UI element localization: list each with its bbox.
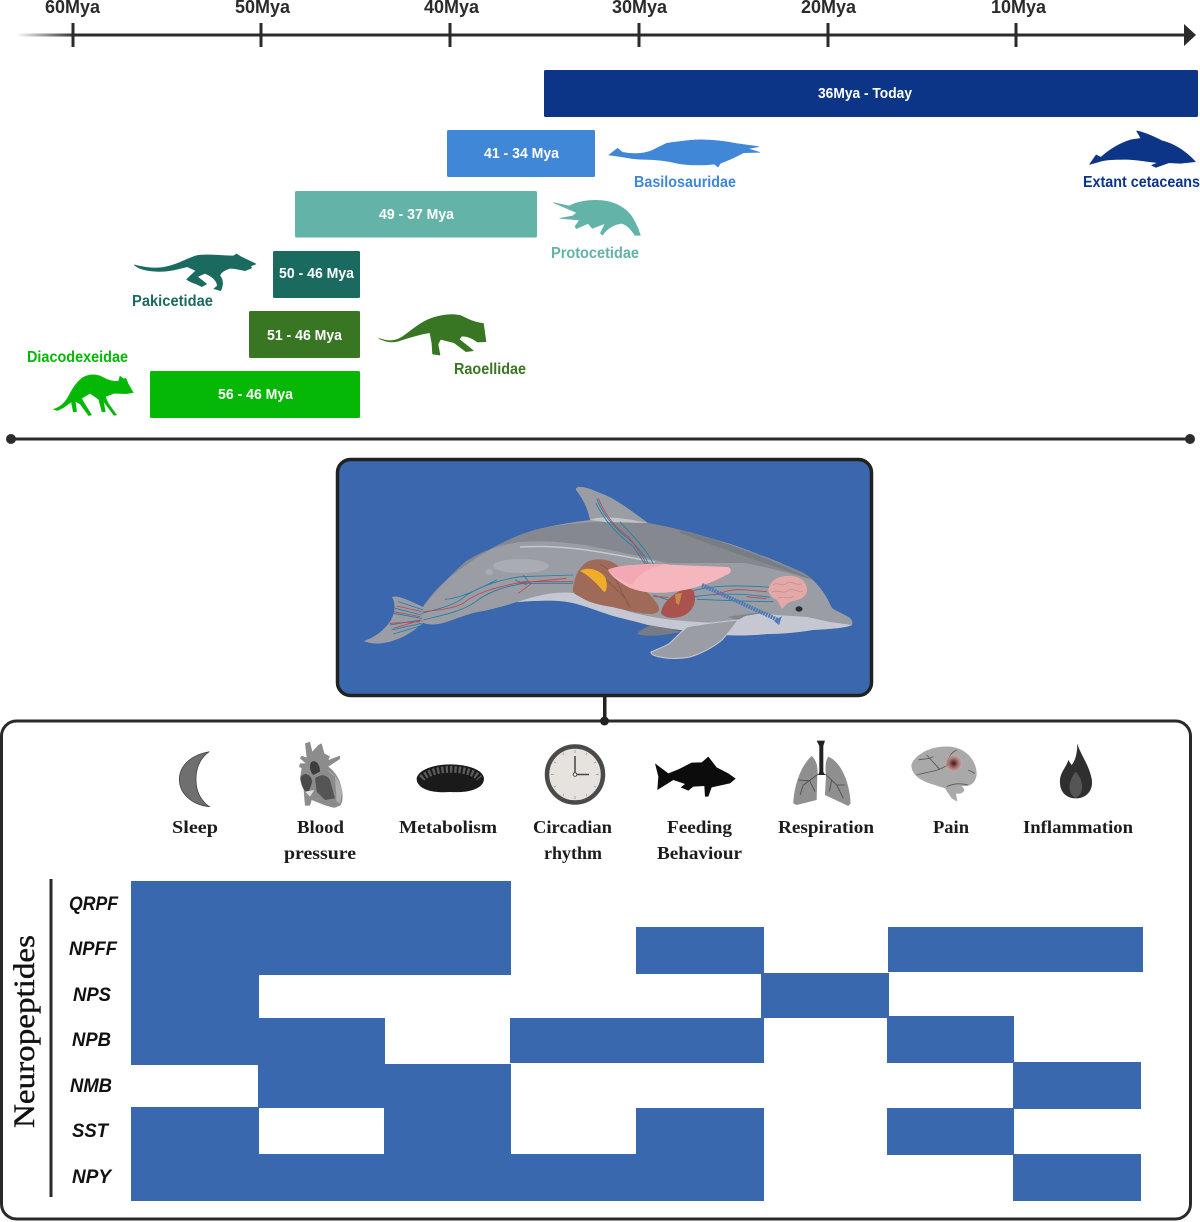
illustration: dolphin anatomy (364, 487, 852, 658)
icon: heart (299, 742, 343, 808)
icon: flame (1060, 743, 1092, 798)
label: inflammation: Inflammation (1023, 817, 1133, 837)
row labels: QRPF (69, 894, 119, 915)
row labels (69, 894, 119, 1188)
row labels: NPB (72, 1030, 111, 1051)
label: pain: Pain (933, 817, 969, 837)
range bar: extant cetaceans: 36Mya - Today (818, 85, 913, 102)
label: Raoellidae: Raoellidae (454, 361, 526, 378)
range bar: extant cetaceans (544, 70, 1198, 117)
gallbladder (580, 569, 607, 592)
label: metabolism: Metabolism (399, 817, 497, 837)
stomach (661, 589, 695, 618)
timeline axis (16, 0, 1196, 47)
section divider (6, 434, 1195, 444)
range bar: Pakicetidae: 50 - 46 Mya (279, 265, 355, 282)
connector (600, 696, 609, 726)
blood vessels: fin and chest (596, 498, 773, 602)
panel: neuropeptide functions (2, 721, 1190, 1219)
label: Pakicetidae: Pakicetidae (132, 293, 213, 310)
row labels: SST (72, 1121, 109, 1142)
icon: mitochondrion (417, 764, 484, 792)
silhouette: Diacodexeid (53, 375, 133, 416)
blood vessels: tail (390, 575, 573, 634)
label: feeding behaviour: Feeding (667, 817, 732, 837)
icon: clock (547, 746, 603, 802)
silhouette: Basilosauridae (609, 140, 759, 167)
label: feeding behaviour: Behaviour (657, 843, 742, 863)
label: feeding behaviour (657, 817, 742, 863)
shoulder shading (727, 612, 770, 620)
row labels: NPFF (69, 939, 118, 960)
top edge shading (680, 530, 813, 580)
dolphin body (364, 487, 852, 644)
liver (573, 559, 659, 614)
icon: fish (655, 757, 736, 797)
silhouette: Raoellidae (379, 315, 486, 355)
far pectoral fin (637, 625, 682, 636)
label: Protocetidae: Protocetidae (551, 245, 639, 262)
body highlights (520, 546, 655, 562)
range bar: Raoellidae (249, 311, 360, 358)
axis title: neuropeptides: Neuropeptides (8, 935, 41, 1128)
lung (608, 564, 731, 593)
label: blood pressure (284, 817, 356, 863)
row labels: NMB (70, 1076, 112, 1097)
label: sleep: Sleep (172, 817, 218, 837)
label: Basilosauridae: Basilosauridae (634, 174, 736, 191)
range bar: Diacodexeidae: 56 - 46 Mya (218, 386, 294, 403)
row labels: NPY (72, 1167, 113, 1188)
range bar: Pakicetidae (273, 251, 360, 298)
dorsal fin shading (590, 517, 648, 523)
label: blood pressure: pressure (284, 843, 356, 863)
range bar: Protocetidae (295, 191, 537, 238)
trachea (702, 585, 778, 620)
label: Diacodexeidae: Diacodexeidae (27, 349, 128, 366)
label: respiration: Respiration (778, 817, 874, 837)
eye (796, 606, 802, 612)
range bar: Diacodexeidae (150, 371, 360, 418)
label: circadian rhythm: Circadian (533, 817, 612, 837)
heatmap: neuropeptide functions (131, 881, 1143, 1201)
silhouette: Protocetidae (554, 200, 640, 235)
range bar: Basilosauridae: 41 - 34 Mya (484, 145, 560, 162)
icon: lungs (793, 741, 851, 806)
row labels: NPS (73, 985, 111, 1006)
silhouette: extant dolphin (1090, 131, 1195, 167)
back shading (423, 522, 813, 607)
icon: moon (179, 752, 209, 807)
silhouette: Pakicetidae (134, 254, 256, 291)
icon: brain (911, 746, 977, 802)
belly (517, 593, 852, 636)
pectoral flipper (651, 620, 738, 658)
brain (768, 576, 807, 609)
axis rule (50, 879, 52, 1197)
label: circadian rhythm: rhythm (544, 843, 602, 863)
panel: dolphin anatomy (338, 460, 872, 696)
label: circadian rhythm (533, 817, 612, 863)
label: blood pressure: Blood (297, 817, 344, 837)
range bar: Raoellidae: 51 - 46 Mya (267, 327, 343, 344)
range bar: Basilosauridae (447, 130, 595, 177)
range bar: Protocetidae: 49 - 37 Mya (379, 206, 455, 223)
